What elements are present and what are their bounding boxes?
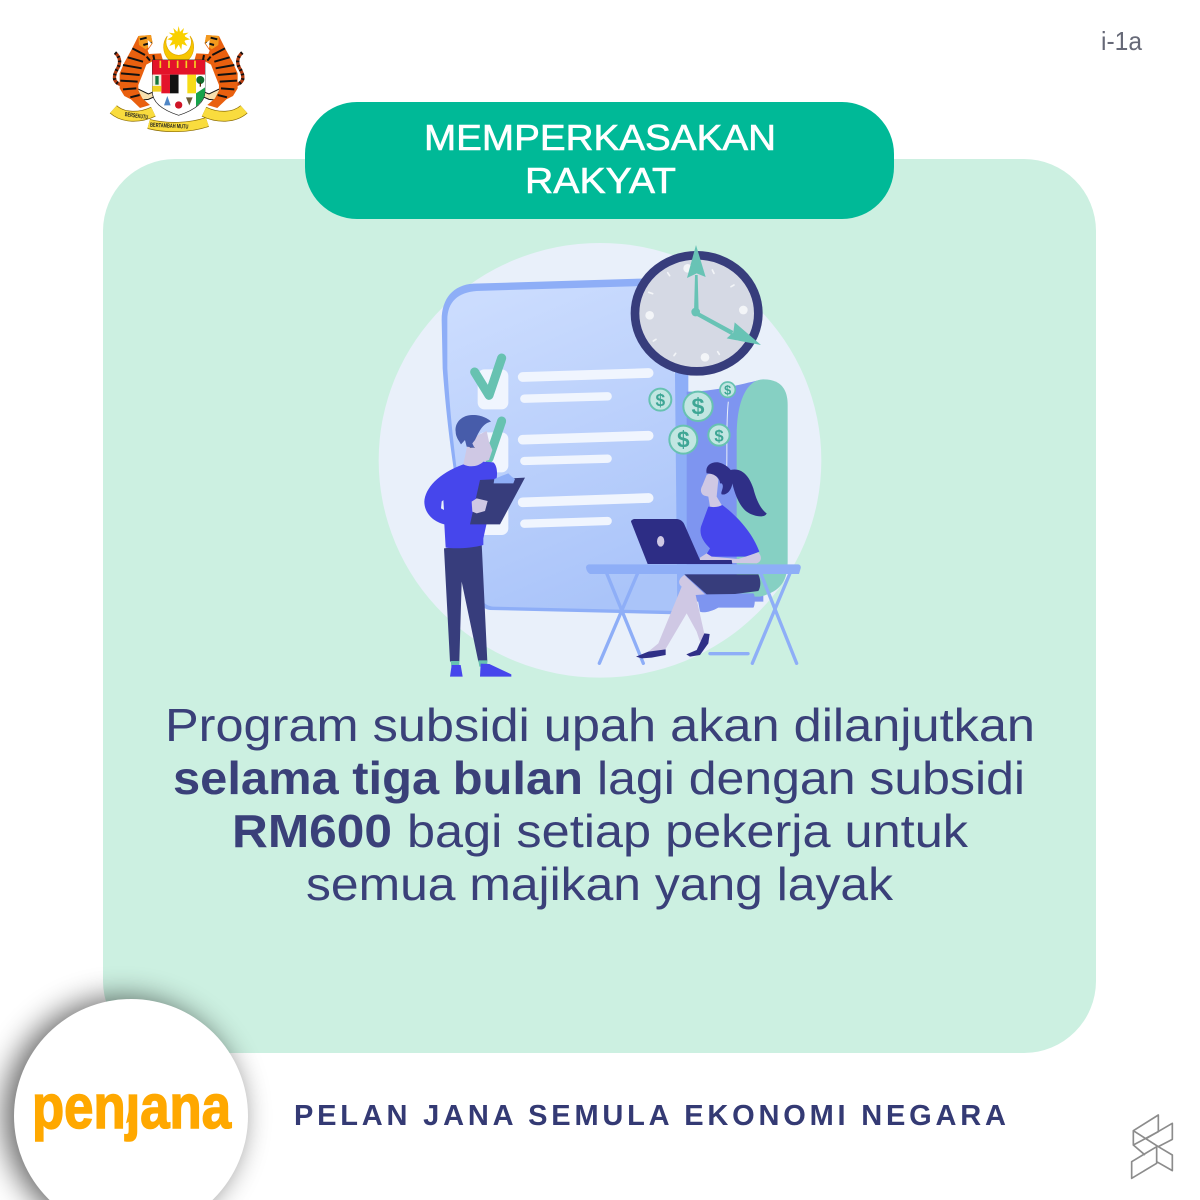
motto centre: BERTAMBAH MUTU: [150, 123, 188, 131]
desk legs: [599, 572, 797, 663]
panel: mint background: [103, 159, 1096, 1053]
money coins: $: [656, 390, 666, 410]
line 1: Program subsidi upah akan dilanjutkan: [165, 699, 1035, 751]
motto left: BERSEKUTU: [124, 112, 148, 121]
line 3 bold: RM600: [232, 805, 392, 857]
penjana wordmark: penjana: [32, 1073, 231, 1142]
right tiger: [194, 35, 243, 108]
check marks: [475, 358, 502, 458]
title pill: [305, 102, 894, 219]
penjana logo badge: [4, 998, 248, 1200]
title line 2: RAKYAT: [525, 160, 676, 201]
icon: publisher logo: [1132, 1115, 1172, 1178]
checklist lines: [523, 373, 649, 524]
document: [442, 278, 678, 614]
money coins: $: [724, 383, 731, 397]
shield: [152, 60, 205, 115]
title line 1: MEMPERKASAKAN: [424, 117, 776, 158]
man with clipboard: [424, 415, 525, 677]
line 4: semua majikan yang layak: [306, 858, 894, 910]
icon: Malaysian coat of arms: [113, 26, 244, 131]
line 2 regular: lagi dengan subsidi: [597, 752, 1025, 804]
money coins: $: [692, 394, 705, 420]
left tiger: [114, 35, 163, 108]
illustration: [379, 243, 821, 678]
line 3 regular: bagi setiap pekerja untuk: [407, 805, 969, 857]
clock: [635, 245, 761, 371]
money coins: $: [714, 426, 724, 445]
page code: i-1a: [1101, 26, 1143, 56]
wheat leaf on the j: [126, 1094, 135, 1123]
checklist boxes: [478, 369, 508, 535]
line 2 bold: selama tiga bulan: [173, 752, 583, 804]
back panel and green chair: [675, 368, 788, 602]
seated woman, laptop and table top: [586, 462, 801, 658]
background circle: [379, 243, 821, 678]
crescent and star: [164, 26, 194, 64]
footer tagline: PELAN JANA SEMULA EKONOMI NEGARA: [294, 1100, 1006, 1132]
money coins: $: [677, 427, 690, 453]
body text: [165, 699, 1035, 910]
motto ribbon: [113, 109, 244, 131]
laptop: [631, 519, 732, 564]
money coins: [649, 382, 735, 454]
clock hands: [687, 245, 761, 345]
table top: [586, 564, 801, 574]
